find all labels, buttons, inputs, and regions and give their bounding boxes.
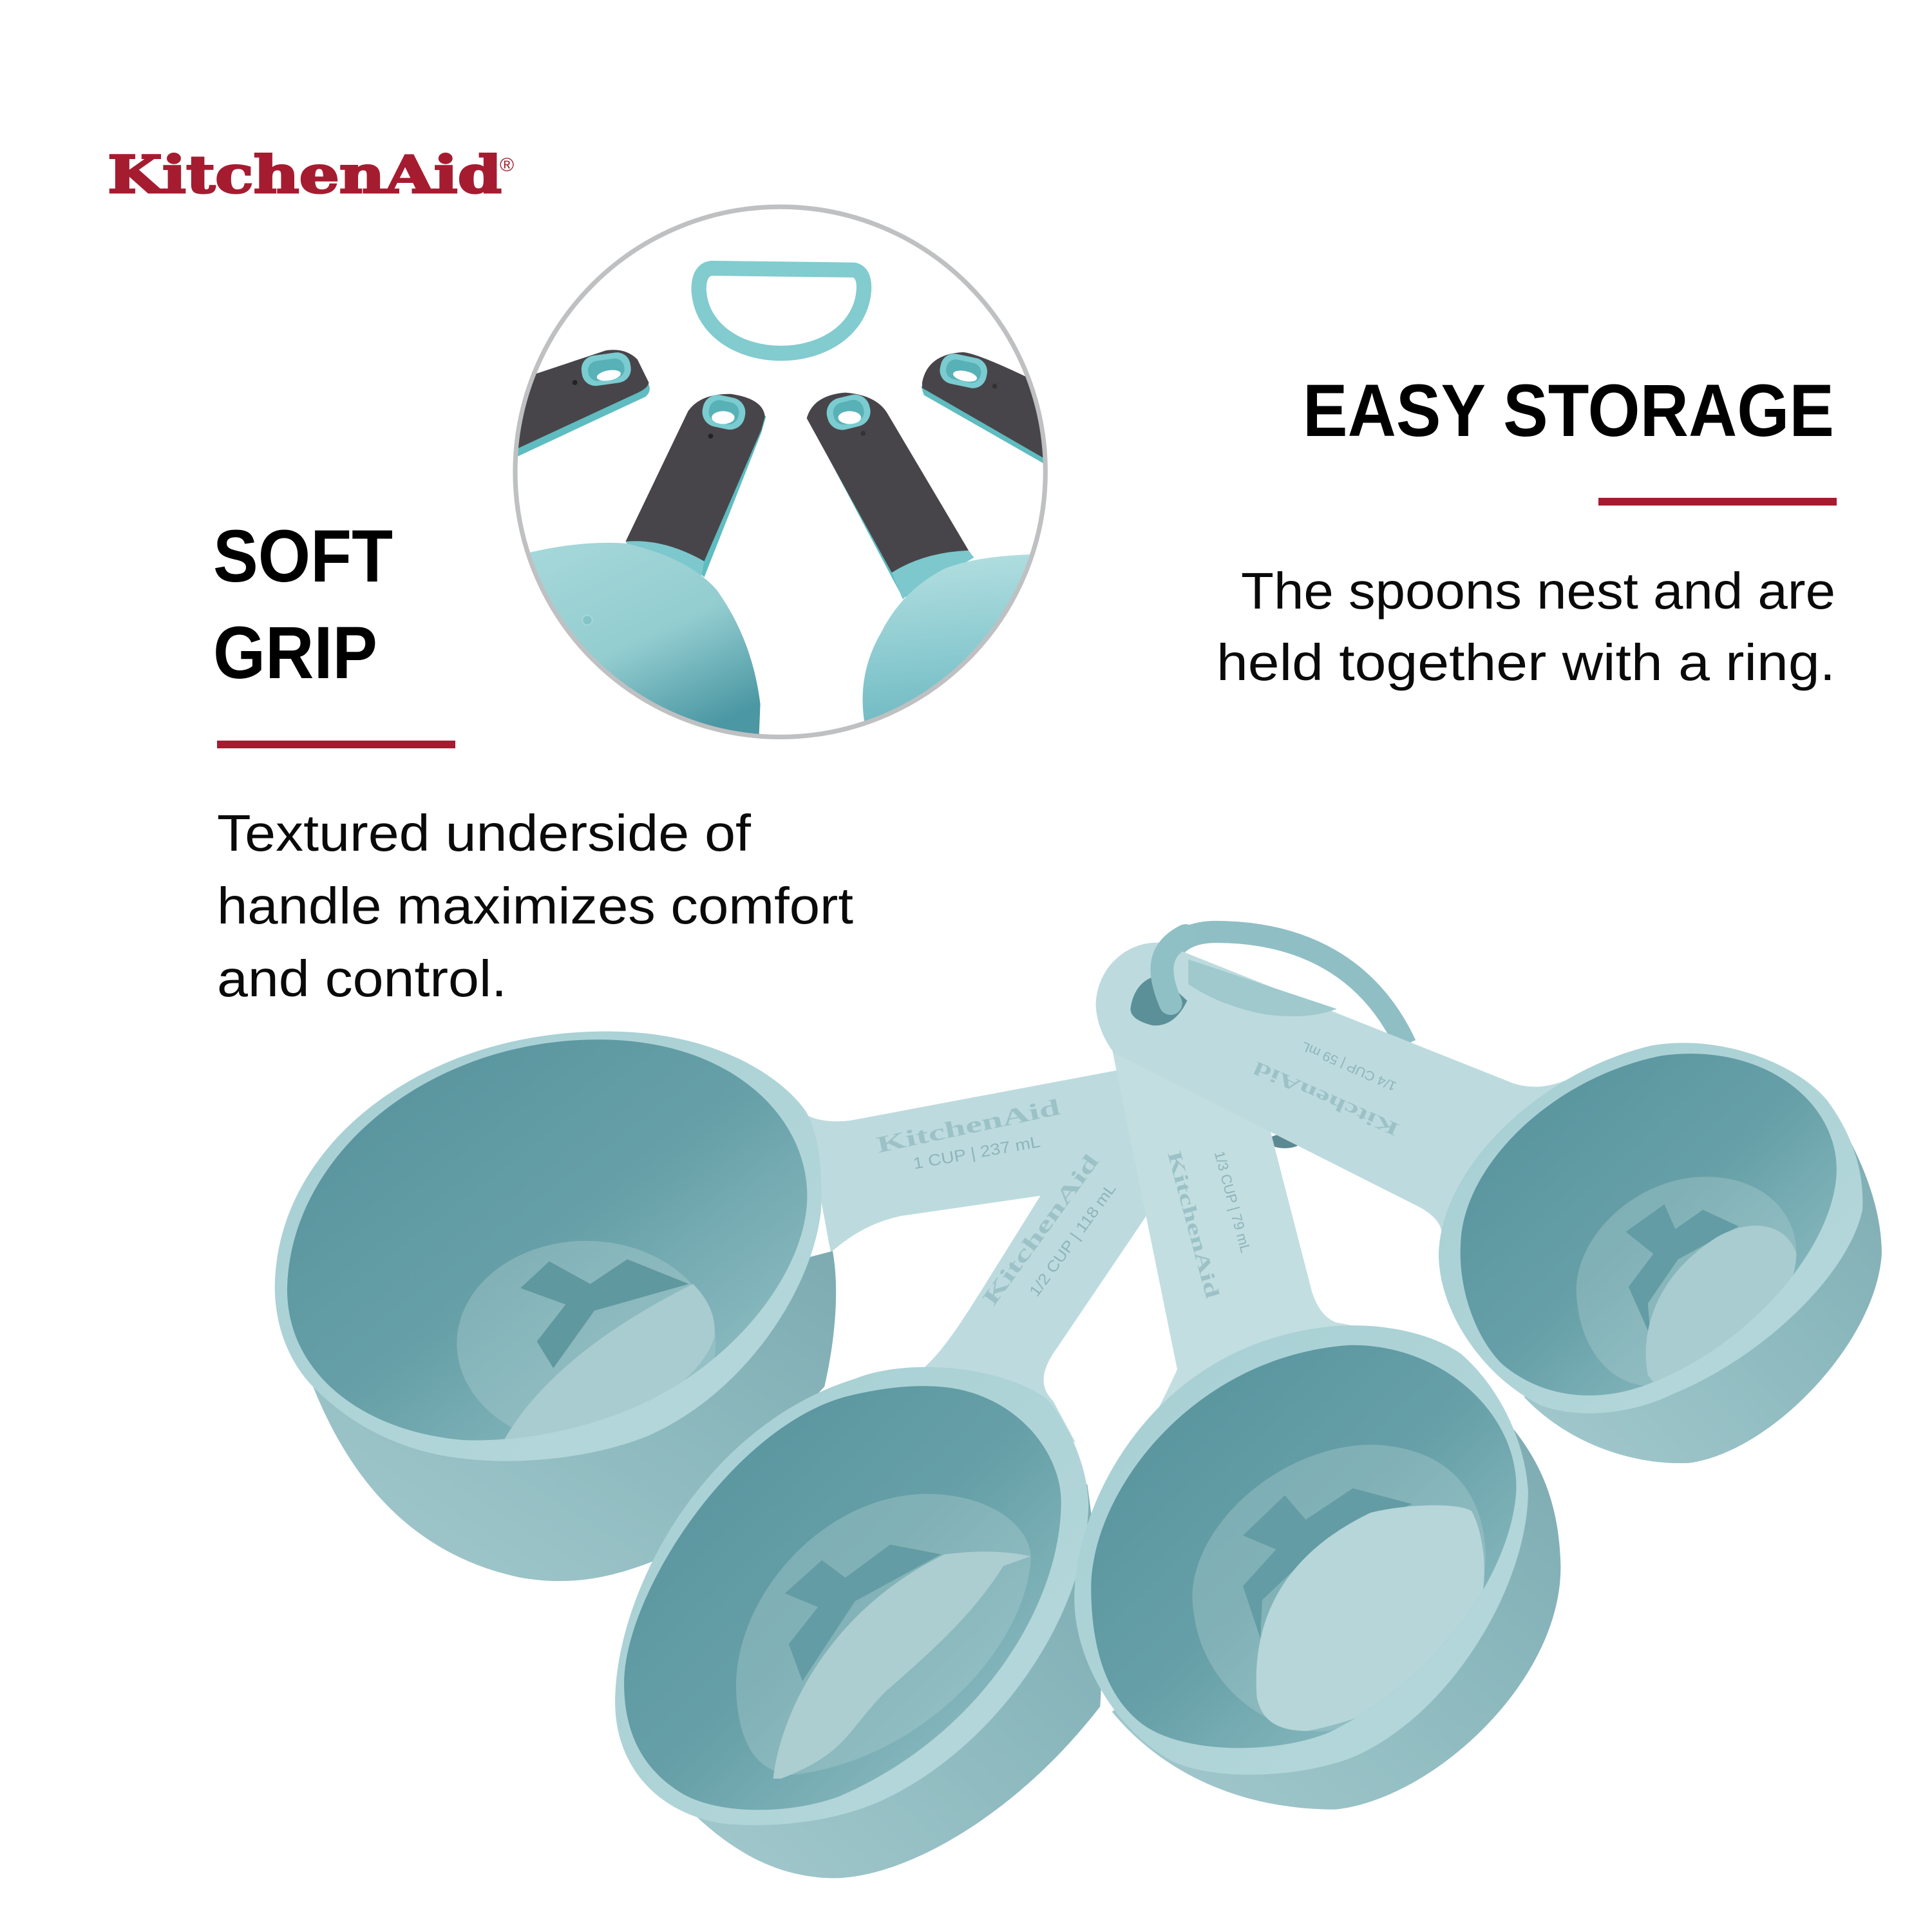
icon: dimple on left cup: [582, 615, 592, 625]
cup rim: 1 cup: [275, 1031, 822, 1461]
text block: soft grip description: and control.: [217, 950, 507, 1007]
logo: KitchenAid: ®: [500, 155, 514, 176]
text block: easy storage description: The spoons nest and are: [1241, 562, 1835, 620]
cup handle: 1/3 cup: 1/3 CUP | 79 mL: [1211, 1150, 1254, 1255]
product: 1/2 cup measure: [615, 1072, 1148, 1878]
divider: soft grip: [217, 741, 455, 748]
text block: easy storage description: held together with a ring.: [1217, 634, 1835, 691]
cup interior: 1/3 cup: [1091, 1345, 1516, 1748]
cup handle: 1/4 cup with hanging hole: [1096, 936, 1566, 1265]
cup interior: 1/4 cup: [1461, 1054, 1837, 1396]
cup handle: 1/2 cup: KitchenAid: [978, 1150, 1104, 1310]
shadow: spot beneath handle: [1268, 1134, 1302, 1148]
handle: far left: [509, 350, 650, 457]
icon: D-shaped ring: [699, 269, 864, 354]
cup handle: 1 cup: 1 CUP | 237 mL: [912, 1133, 1042, 1173]
heading: soft grip: GRIP: [213, 612, 377, 694]
cup interior: 1 cup: [287, 1039, 807, 1440]
text block: soft grip description: [217, 804, 853, 1007]
circular inset: soft grip handles and ring: [509, 207, 1052, 740]
cup body: 1/3 cup: [1112, 1429, 1560, 1810]
heading: soft grip: SOFT: [213, 515, 393, 598]
product: 1/3 cup measure: [1074, 1045, 1560, 1810]
cup: lower right underside: [863, 554, 1030, 721]
cup rim: 1/4 cup: [1439, 1043, 1862, 1414]
text block: soft grip description: handle maximizes comfort: [217, 877, 853, 934]
interior reflection: 1/4 cup: [1577, 1177, 1796, 1386]
interior reflection: 1/2 cup: [736, 1494, 1031, 1779]
interior reflection: 1 cup: [457, 1241, 715, 1446]
cup handle: 1/4 cup with hanging hole: KitchenAid: [1251, 1057, 1402, 1140]
divider: easy storage: [1598, 498, 1837, 506]
cup handle: 1/4 cup with hanging hole: 1/4 CUP | 59 mL: [1299, 1039, 1399, 1094]
handle: inner left: [625, 392, 766, 581]
cup body: 1/4 cup: [1524, 1100, 1882, 1463]
cup handle: 1/2 cup: 1/2 CUP | 118 mL: [1026, 1180, 1120, 1300]
heading: soft grip: [213, 515, 393, 694]
cup handle: 1 cup: [805, 1069, 1159, 1253]
cup rim: 1/3 cup: [1074, 1325, 1528, 1775]
text block: soft grip description: Textured underside of: [217, 804, 752, 862]
product: 1/4 cup measure: [1096, 936, 1882, 1463]
ring through handles: [1164, 932, 1406, 1045]
interior reflection: 1/3 cup: [1192, 1444, 1486, 1731]
cup: lower left underside: [530, 542, 761, 734]
logo: KitchenAid: KitchenAid: [108, 144, 502, 205]
cup rim: 1/2 cup: [615, 1367, 1088, 1825]
text block: easy storage description: [1217, 562, 1835, 691]
heading: easy storage: EASY STORAGE: [1303, 370, 1834, 452]
handle: far right: [921, 351, 1049, 466]
product: 1 cup measure: [275, 1031, 1159, 1581]
cup body: 1 cup: [313, 1251, 836, 1581]
cup handle: 1/2 cup: [898, 1072, 1148, 1443]
handle: inner right: [807, 392, 974, 600]
cup handle: 1/3 cup: [1111, 1045, 1452, 1468]
cup body: 1/2 cup: [683, 1484, 1101, 1878]
cup handle: 1 cup: KitchenAid: [875, 1094, 1062, 1158]
cup interior: 1/2 cup: [624, 1386, 1061, 1810]
cup handle: 1/3 cup: KitchenAid: [1163, 1149, 1224, 1301]
